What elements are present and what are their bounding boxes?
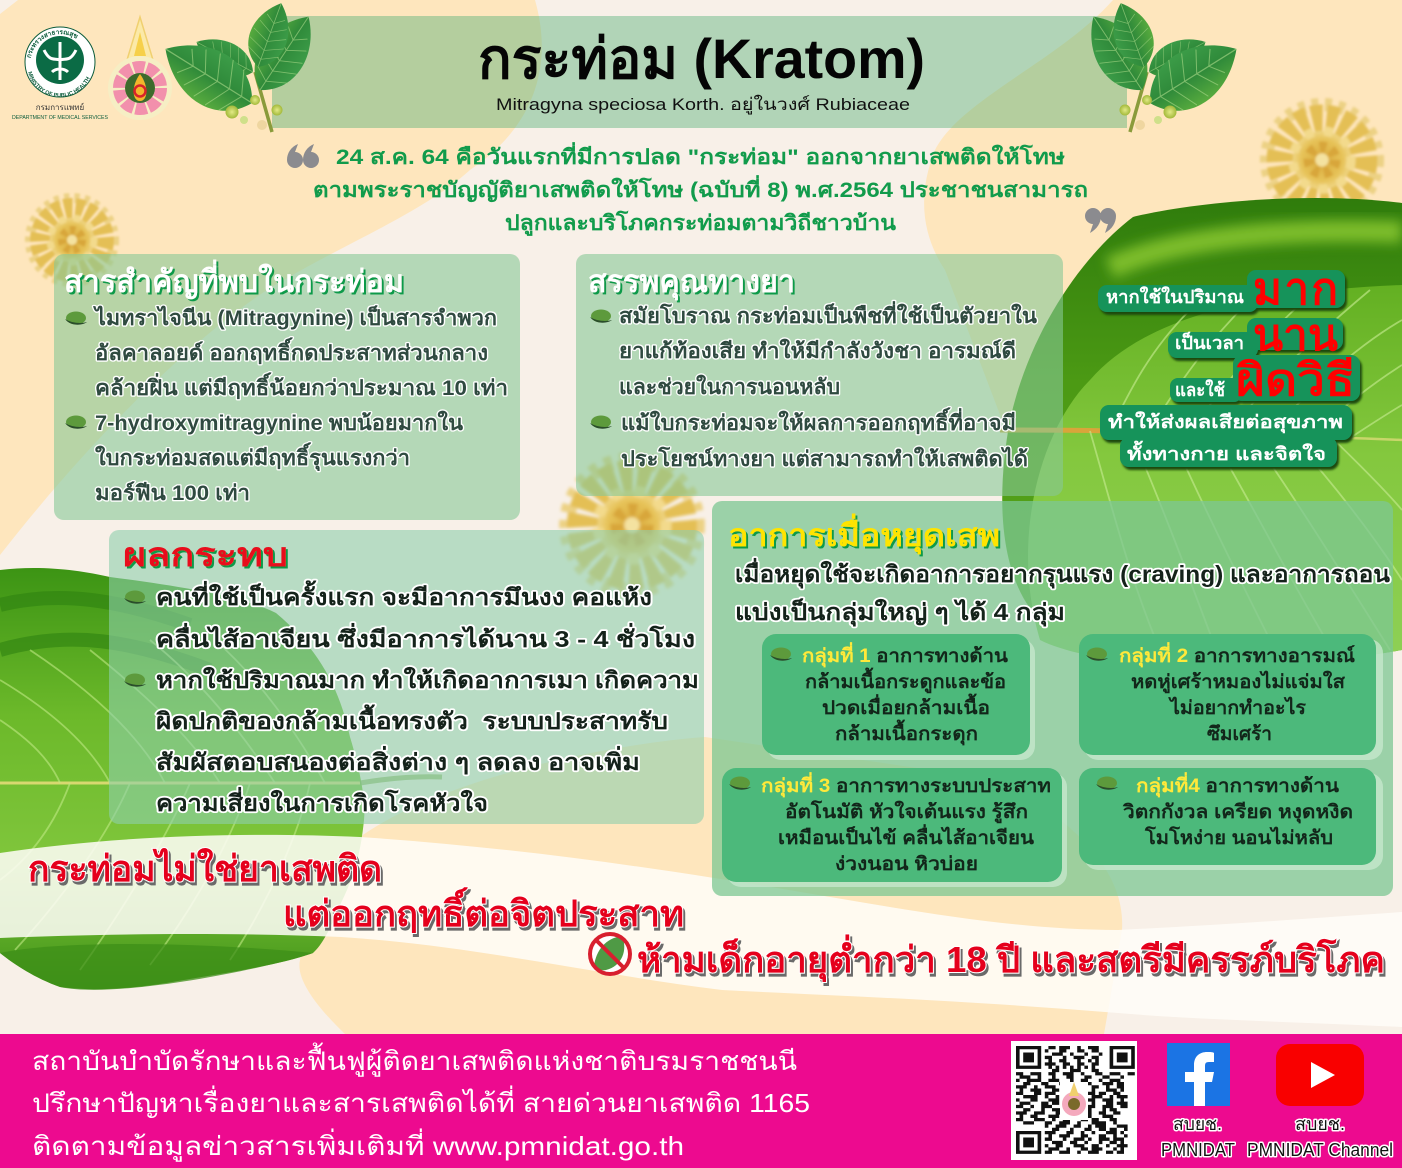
- logo: ministry of public health: MINISTRY OF PUBLIC HEALTH: [28, 71, 90, 96]
- panel: withdrawal: เมื่อหยุดใช้จะเกิดอาการอยากรุนแรง (craving) และอาการถอน: [735, 557, 1390, 589]
- logo: ministry of public health: กรมการแพทย์: [36, 102, 84, 112]
- panel: medicinal properties: ยาแก้ท้องเสีย ทำให้มีกำลังวังชา อารมณ์ดี: [619, 338, 1016, 363]
- footer: contact text: ปรึกษาปัญหาเรื่องยาและสารเสพติดได้ที่ สายด่วนยาเสพติด 1165: [32, 1085, 810, 1118]
- callout: warning on leaf: หากใช้ในปริมาณ: [1106, 286, 1244, 307]
- icon: youtube: [1276, 1044, 1364, 1106]
- callout: warning on leaf: [1098, 265, 1360, 467]
- label: facebook: [1161, 1114, 1235, 1160]
- label: youtube: [1247, 1114, 1393, 1160]
- panel: active compounds: ไมทราไจนีน (Mitragynine) เป็นสารจำพวก: [93, 304, 497, 330]
- icon: leaf bullet: [65, 416, 87, 429]
- panel: medicinal properties: [576, 254, 1063, 496]
- heading: medicinal properties: สรรพคุณทางยา: [588, 264, 795, 301]
- title: กระท่อม (Kratom): [478, 27, 925, 90]
- callout: warning on leaf: ทั้งทางกาย และจิตใจ: [1127, 440, 1326, 464]
- icon: leaf bullet: [590, 310, 612, 323]
- heading: active compounds: สารสำคัญที่พบในกระท่อม: [64, 259, 404, 300]
- box: group 4: โมโหง่าย นอนไม่หลับ: [1144, 826, 1333, 849]
- panel: medicinal properties: ประโยชน์ทางยา แต่สามารถทำให้เสพติดได้: [621, 446, 1028, 471]
- box: group 2: [1079, 634, 1383, 760]
- panel: active compounds: ใบกระท่อมสดแต่มีฤทธิ์รุนแรงกว่า: [95, 442, 410, 472]
- flower: top right: [1267, 105, 1377, 215]
- quote block: ปลูกและบริโภคกระท่อมตามวิถีชาวบ้าน: [505, 210, 897, 237]
- box: group 1: [762, 634, 1035, 760]
- panel: medicinal properties: สมัยโบราณ กระท่อมเป็นพืชที่ใช้เป็นตัวยาใน: [619, 300, 1038, 328]
- flower: top left: [30, 198, 114, 282]
- quote block: [287, 141, 1116, 237]
- box: group 3: เหมือนเป็นไข้ คลื่นไส้อาเจียน: [778, 824, 1034, 849]
- panel: effects: ผิดปกติของกล้ามเนื้อทรงตัว ระบบประสาทรับ: [155, 704, 668, 734]
- footer: contact text: [32, 1042, 810, 1162]
- icon: leaf bullet: [124, 590, 146, 604]
- callout: warning on leaf: เป็นเวลา: [1175, 331, 1244, 353]
- callout: warning on leaf: ทำให้ส่งผลเสียต่อสุขภาพ: [1108, 411, 1343, 434]
- header leaves left: [150, 0, 327, 132]
- panel: active compounds: คล้ายฝิ่น แต่มีฤทธิ์น้อยกว่าประมาณ 10 เท่า: [95, 372, 508, 400]
- panel: effects: ความเสี่ยงในการเกิดโรคหัวใจ: [156, 786, 488, 816]
- label: youtube: PMNIDAT Channel: [1247, 1140, 1393, 1160]
- box: group 2: หดหู่เศร้าหมองไม่แจ่มใส: [1131, 670, 1345, 694]
- logo: ministry of public health: กระทรวงสาธารณสุข: [27, 30, 78, 58]
- box: group 2: กลุ่มที่ 2 อาการทางอารมณ์: [1119, 642, 1355, 668]
- footer band: [0, 1034, 1402, 1168]
- heading: withdrawal: อาการเมื่อหยุดเสพ: [728, 513, 1000, 555]
- quote block: ตามพระราชบัญญัติยาเสพติดให้โทษ (ฉบับที่ 8) พ.ศ.2564 ประชาชนสามารถ: [313, 174, 1088, 203]
- icon: leaf bullet: [590, 416, 612, 429]
- box: group 1: กล้ามเนื้อกระดุก: [835, 719, 978, 746]
- header banner: [272, 16, 1127, 128]
- label: facebook: สบยช.: [1173, 1114, 1222, 1134]
- label: facebook: PMNIDAT: [1161, 1140, 1235, 1160]
- panel: effects: สัมผัสตอบสนองต่อสิ่งต่าง ๆ ลดลง อาจเพิ่ม: [156, 745, 640, 775]
- panel: active compounds: อัลคาลอยด์ ออกฤทธิ์กดประสาทส่วนกลาง: [95, 337, 488, 365]
- heading: effects: ผลกระทบ: [123, 536, 288, 573]
- slogan: not a narcotic: กระท่อมไม่ใช่ยาเสพติด: [28, 847, 382, 889]
- box: group 4: กลุ่มที่4 อาการทางด้าน: [1136, 772, 1339, 798]
- flower: center: [567, 460, 697, 590]
- logo: ministry of public health: [12, 26, 108, 121]
- panel: withdrawal: แบ่งเป็นกลุ่มใหญ่ ๆ ได้ 4 กลุ่ม: [735, 597, 1065, 627]
- icon: leaf bullet: [124, 674, 146, 687]
- icon: leaf bullet: [65, 312, 87, 325]
- box: group 4: วิตกกังวล เครียด หงุดหงิด: [1123, 801, 1353, 824]
- quote block: 24 ส.ค. 64 คือวันแรกที่มีการปลด "กระท่อม" ออกจากยาเสพติดให้โทษ: [336, 141, 1065, 169]
- logo: ministry of public health: DEPARTMENT OF MEDICAL SERVICES: [12, 115, 108, 121]
- panel: active compounds: [54, 254, 520, 520]
- callout: warning on leaf: ผิดวิธี: [1236, 356, 1355, 405]
- header leaves right: [1075, 0, 1252, 132]
- box: group 3: กลุ่มที่ 3 อาการทางระบบประสาท: [761, 772, 1051, 798]
- icon: no kratom: [590, 934, 630, 974]
- slogan: acts on the nervous system: แต่ออกฤทธิ์ต่อจิตประสาท: [283, 887, 684, 934]
- callout backing shapes: [1098, 270, 1360, 467]
- subtitle: Mitragyna speciosa Korth. อยู่ในวงศ์ Rubiaceae: [496, 94, 910, 115]
- box: group 1: กล้ามเนื้อกระดูกและข้อ: [805, 667, 1006, 694]
- box: group 2: ซึมเศร้า: [1207, 723, 1272, 745]
- panel: effects: [109, 530, 704, 824]
- callout: warning on leaf: มาก: [1253, 265, 1338, 314]
- QR code: [1011, 1041, 1137, 1160]
- box: group 4: [1079, 768, 1383, 870]
- white swoosh band: [0, 835, 1402, 1027]
- box: group 3: ง่วงนอน หิวบ่อย: [835, 854, 978, 875]
- warning: prohibited for minors and pregnant women: ห้ามเด็กอายุต่ำกว่า 18 ปี และสตรีมีครรภ์บริโภค: [637, 934, 1385, 983]
- footer: contact text: ติดตามข้อมูลข่าวสารเพิ่มเติมที่ www.pmnidat.go.th: [32, 1128, 684, 1162]
- background: cream blob top right: [924, 0, 1402, 520]
- panel: effects: หากใช้ปริมาณมาก ทำให้เกิดอาการเมา เกิดความ: [156, 666, 699, 693]
- box: group 1: ปวดเมื่อยกล้ามเนื้อ: [822, 693, 990, 719]
- big leaf right: [1000, 198, 1402, 666]
- label: youtube: สบยช.: [1295, 1114, 1345, 1134]
- logo: institute: [108, 17, 172, 120]
- panel: effects: คนที่ใช้เป็นครั้งแรก จะมีอาการมึนงง คอแห้ง: [156, 580, 652, 610]
- panel: withdrawal: [712, 501, 1393, 896]
- icon: opening quote: [287, 144, 319, 168]
- callout: warning on leaf: และใช้: [1175, 379, 1225, 400]
- background: cream blob bottom: [299, 737, 1122, 1034]
- box: group 3: [722, 768, 1067, 887]
- panel: active compounds: 7-hydroxymitragynine พบน้อยมากใน: [95, 410, 464, 435]
- panel: active compounds: มอร์ฟีน 100 เท่า: [95, 481, 250, 505]
- box: group 1: กลุ่มที่ 1 อาการทางด้าน: [802, 642, 1008, 668]
- box: group 2: ไม่อยากทำอะไร: [1168, 696, 1307, 719]
- panel: effects: คลื่นไส้อาเจียน ซึ่งมีอาการได้นาน 3 - 4 ชั่วโมง: [156, 622, 695, 652]
- panel: medicinal properties: และช่วยในการนอนหลับ: [619, 374, 840, 399]
- background: cream blob top left: [0, 0, 542, 555]
- big leaf left: [0, 568, 442, 990]
- callout: warning on leaf: นาน: [1253, 311, 1338, 360]
- icon: facebook: [1167, 1043, 1230, 1106]
- panel: medicinal properties: แม้ใบกระท่อมจะให้ผลการออกฤทธิ์ที่อาจมี: [621, 407, 1016, 435]
- box: group 3: อัตโนมัติ หัวใจเต้นแรง รู้สึก: [785, 800, 1028, 824]
- icon: closing quote: [1085, 208, 1116, 233]
- footer: contact text: สถาบันบำบัดรักษาและฟื้นฟูผู้ติดยาเสพติดแห่งชาติบรมราชชนนี: [32, 1042, 797, 1077]
